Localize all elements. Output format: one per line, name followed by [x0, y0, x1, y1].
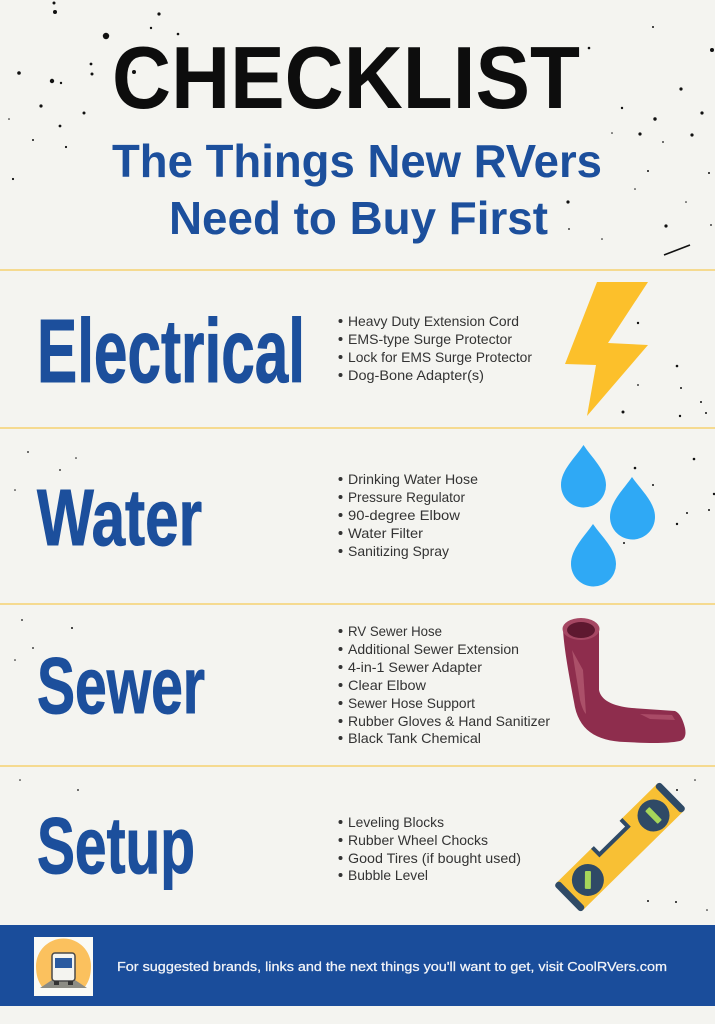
list: setup items: Bubble Level — [348, 867, 428, 883]
subtitle — [112, 135, 602, 244]
list: water items: Pressure Regulator — [348, 489, 465, 505]
list: sewer items: 4-in-1 Sewer Adapter — [348, 659, 482, 675]
footer text: For suggested brands, links and the next things you'll want to get, visit CoolRVers.com — [117, 959, 667, 974]
heading: setup: Setup — [37, 801, 195, 890]
list: sewer items: RV Sewer Hose — [348, 623, 442, 639]
list: sewer items: Clear Elbow — [348, 677, 427, 693]
panel: sewer — [37, 618, 685, 746]
list: sewer items: Sewer Hose Support — [348, 695, 475, 711]
list: sewer items: Additional Sewer Extension — [348, 641, 519, 657]
heading: electrical: Electrical — [37, 302, 305, 402]
heading: water: Water — [37, 473, 202, 562]
icon: sewer elbow pipe — [562, 618, 685, 743]
list: electrical items: Dog-Bone Adapter(s) — [348, 367, 484, 383]
list: setup items: Leveling Blocks — [348, 814, 444, 830]
icon: bubble level — [554, 782, 686, 912]
list: sewer items: Black Tank Chemical — [348, 730, 481, 746]
list: setup items: Rubber Wheel Chocks — [348, 832, 488, 848]
footer banner — [0, 925, 715, 1006]
list: electrical items: Lock for EMS Surge Protector — [348, 349, 532, 365]
heading: sewer: Sewer — [37, 641, 205, 730]
list: setup items — [338, 814, 521, 883]
list: sewer items: Rubber Gloves & Hand Sanitizer — [348, 713, 550, 729]
panel: setup — [37, 782, 686, 912]
panel: water — [37, 445, 655, 586]
list: electrical items — [338, 313, 532, 383]
list: water items: 90-degree Elbow — [348, 507, 461, 523]
list: electrical items: Heavy Duty Extension Cord — [348, 313, 519, 329]
list: water items: Sanitizing Spray — [348, 543, 449, 559]
subtitle: The Things New RVers — [112, 135, 602, 187]
panel: electrical — [37, 282, 648, 416]
list: electrical items: EMS-type Surge Protector — [348, 331, 512, 347]
list: water items: Water Filter — [348, 525, 423, 541]
list: water items: Drinking Water Hose — [348, 471, 478, 487]
list: water items — [338, 471, 478, 559]
icon: lightning bolt — [565, 282, 648, 416]
title: CHECKLIST — [112, 28, 580, 127]
list: setup items: Good Tires (if bought used) — [348, 850, 521, 866]
icon: RV logo — [34, 937, 93, 996]
subtitle: Need to Buy First — [169, 192, 548, 244]
list: sewer items — [338, 623, 550, 746]
icon: water drops — [561, 445, 655, 586]
